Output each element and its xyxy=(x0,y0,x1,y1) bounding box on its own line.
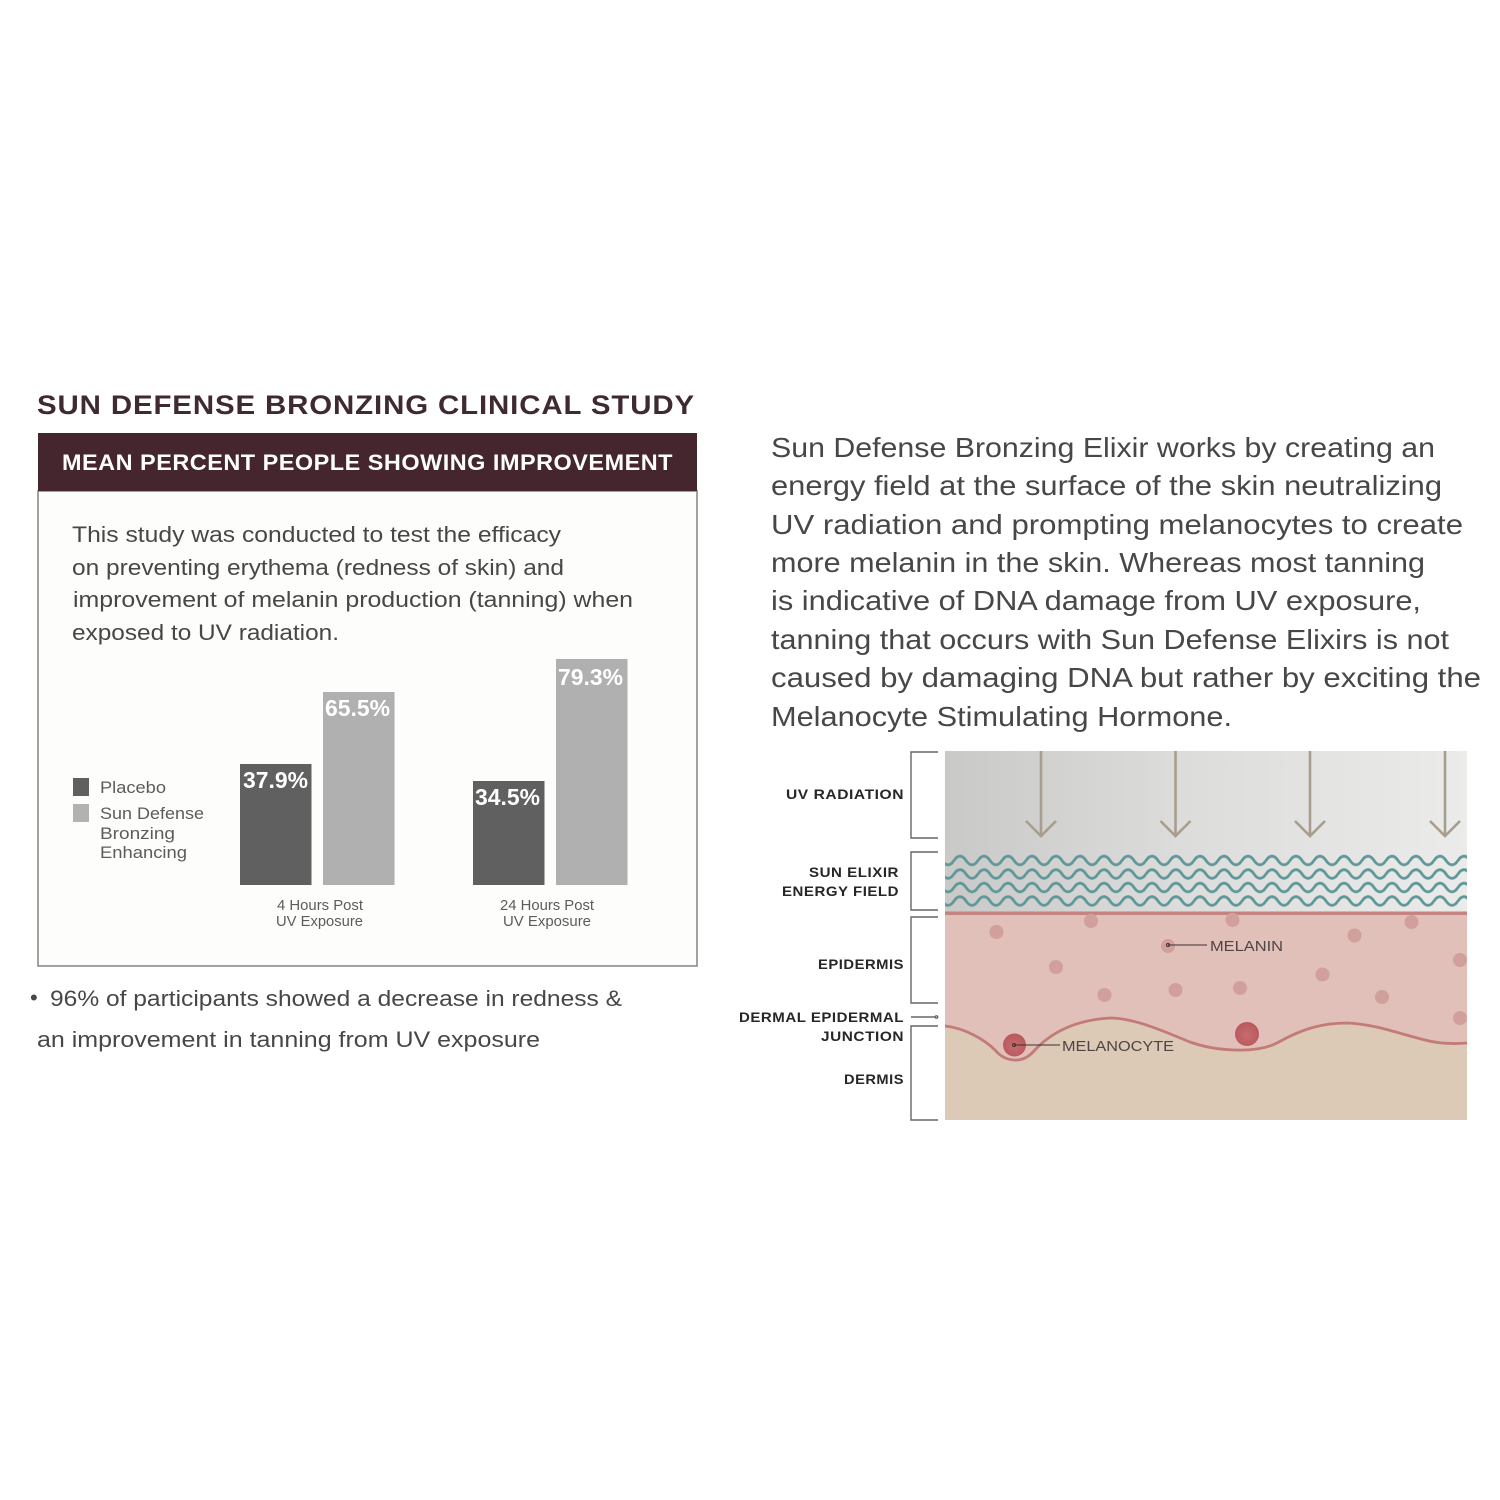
layer labels: SUN ELIXIR xyxy=(809,864,899,880)
study description: on preventing erythema (redness of skin) and xyxy=(72,555,564,580)
layer brackets xyxy=(911,752,938,1120)
explanatory paragraph: tanning that occurs with Sun Defense Elixirs is not xyxy=(771,624,1449,655)
bullet note xyxy=(30,985,622,1052)
legend: Bronzing xyxy=(100,824,175,843)
study description xyxy=(72,522,633,645)
layer labels: JUNCTION xyxy=(821,1028,904,1044)
layer labels: EPIDERMIS xyxy=(818,956,904,972)
layer labels: ENERGY FIELD xyxy=(782,883,899,899)
legend: Enhancing xyxy=(100,843,187,862)
bar chart xyxy=(240,659,628,930)
bar group: 24 hours post UV exposure xyxy=(473,659,628,930)
melanin callout xyxy=(1166,938,1283,955)
bar group: 4 hours post UV exposure: 4 Hours Post xyxy=(277,898,363,914)
panel header xyxy=(38,433,697,491)
study description: improvement of melanin production (tanning) when xyxy=(73,587,633,612)
legend xyxy=(73,778,204,862)
bar group: 4 hours post UV exposure: UV Exposure xyxy=(276,914,363,930)
layer labels: DERMIS xyxy=(844,1071,904,1087)
bar group: 24 hours post UV exposure: 34.5% xyxy=(475,784,540,810)
bar group: 24 hours post UV exposure: 79.3% xyxy=(558,664,623,690)
explanatory paragraph: UV radiation and prompting melanocytes to create xyxy=(771,509,1463,540)
melanin callout: MELANIN xyxy=(1210,938,1283,955)
panel: clinical study results xyxy=(38,433,697,966)
panel header: MEAN PERCENT PEOPLE SHOWING IMPROVEMENT xyxy=(62,450,673,475)
layer labels: UV RADIATION xyxy=(786,786,904,802)
explanatory paragraph: more melanin in the skin. Whereas most tanning xyxy=(771,547,1425,578)
UV radiation and energy field layer xyxy=(945,751,1467,913)
explanatory paragraph: is indicative of DNA damage from UV exposure, xyxy=(771,585,1421,616)
explanatory paragraph xyxy=(771,432,1481,732)
bar group: 24 hours post UV exposure: UV Exposure xyxy=(503,914,591,930)
legend: Placebo xyxy=(100,778,166,797)
dermis layer xyxy=(945,1018,1467,1120)
panel background xyxy=(38,491,697,966)
energy field waves xyxy=(945,854,1467,908)
explanatory paragraph: caused by damaging DNA but rather by exciting the xyxy=(771,662,1481,693)
study description: This study was conducted to test the efficacy xyxy=(72,522,561,547)
bullet note: • xyxy=(30,985,38,1010)
legend: Sun Defense xyxy=(100,804,204,823)
melanin dots xyxy=(990,913,1467,1025)
melanocyte callout: MELANOCYTE xyxy=(1062,1038,1174,1055)
bullet note: an improvement in tanning from UV exposure xyxy=(37,1027,540,1052)
title: SUN DEFENSE BRONZING CLINICAL STUDY xyxy=(37,390,695,420)
bar group: 24 hours post UV exposure: 24 Hours Post xyxy=(500,898,594,914)
bullet note: 96% of participants showed a decrease in redness & xyxy=(50,986,622,1011)
bar group: 4 hours post UV exposure: 37.9% xyxy=(243,767,308,793)
UV arrows xyxy=(1026,751,1460,836)
layer labels: DERMAL EPIDERMAL xyxy=(739,1009,904,1025)
melanocytes xyxy=(1003,1022,1259,1056)
melanocyte callout xyxy=(1012,1038,1174,1055)
dermal epidermal junction line xyxy=(945,1018,1467,1060)
bar group: 4 hours post UV exposure xyxy=(240,692,394,930)
epidermis top line xyxy=(945,912,1467,915)
layer labels xyxy=(739,786,904,1087)
skin layers diagram xyxy=(739,751,1467,1120)
explanatory paragraph: energy field at the surface of the skin neutralizing xyxy=(771,470,1442,501)
diagram layers xyxy=(945,751,1467,1120)
explanatory paragraph: Sun Defense Bronzing Elixir works by creating an xyxy=(771,432,1435,463)
study description: exposed to UV radiation. xyxy=(72,620,339,645)
epidermis layer xyxy=(945,913,1467,1073)
bar group: 4 hours post UV exposure: 65.5% xyxy=(325,695,390,721)
explanatory paragraph: Melanocyte Stimulating Hormone. xyxy=(771,701,1232,732)
